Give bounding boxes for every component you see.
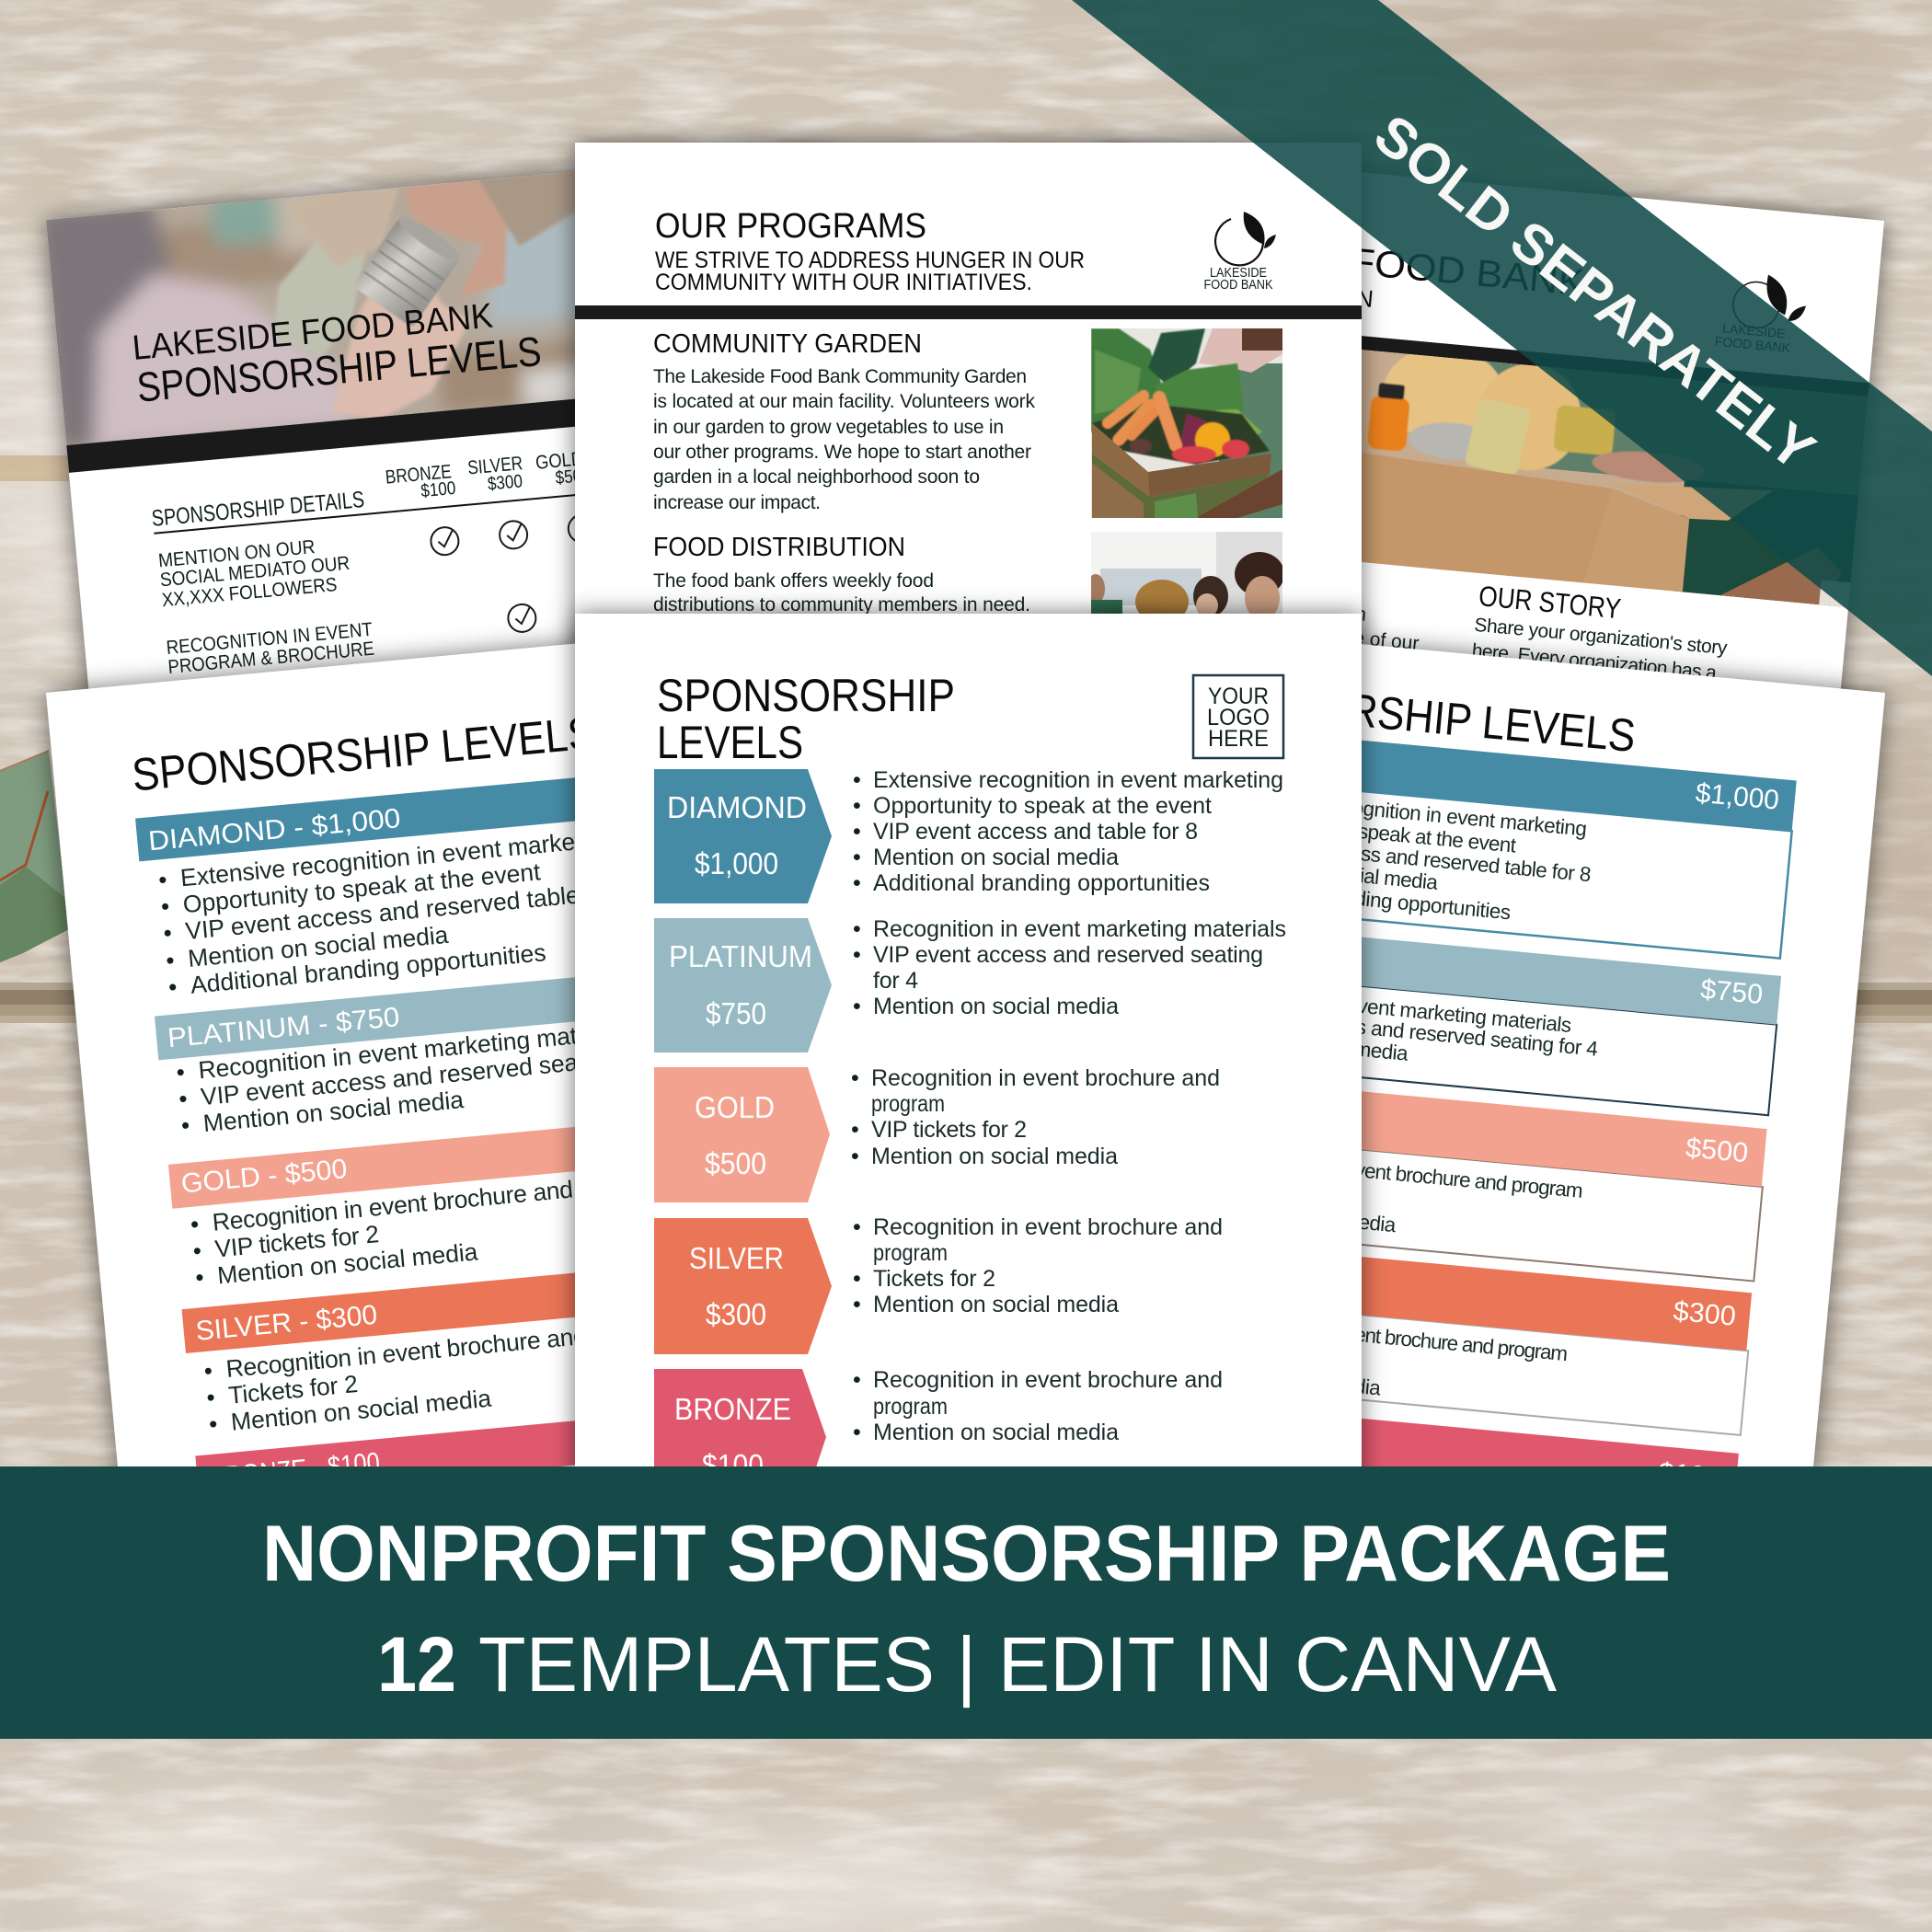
tier: silver: SILVER — [689, 1241, 784, 1275]
tier: platinum: • — [180, 1111, 191, 1139]
heading — [657, 670, 955, 768]
logo placeholder: YOUR — [1208, 684, 1269, 709]
text: mission: the core of our — [1294, 622, 1420, 654]
list: diamond benefits: Extensive recognition in event marketing — [873, 767, 1283, 793]
table header: SILVER — [466, 453, 523, 479]
photo: box of food — [1362, 350, 1868, 607]
tier: diamond: Extensive recognition in event marketing — [1233, 785, 1588, 841]
list: diamond benefits — [853, 767, 1283, 896]
panel: our story page (back right) — [1095, 134, 1899, 690]
banner subheading: 12 — [377, 1621, 456, 1708]
icon: logo: FOOD BANK — [1203, 277, 1273, 293]
heading: OUR PROGRAMS — [655, 207, 926, 246]
text: our story: here. Every organization has a — [1471, 640, 1718, 684]
text: food distribution: FOOD DISTRIBUTION — [653, 533, 905, 562]
text: community garden: in our garden to grow vegetables to use in — [653, 417, 1004, 438]
tier: bronze: $100 — [1657, 1457, 1722, 1493]
text: community garden: our other programs. We hope to start another — [653, 442, 1031, 463]
tier: platinum — [155, 957, 808, 1141]
list: platinum benefits: • — [853, 942, 861, 968]
logo placeholder: HERE — [1208, 726, 1269, 752]
icon: check marks — [430, 513, 604, 639]
tier: platinum: PLATINUM - $750 — [167, 1002, 401, 1053]
list: silver benefits: program — [873, 1240, 948, 1266]
list: platinum benefits: • — [853, 916, 861, 942]
icon: eucalyptus leaf — [0, 751, 69, 962]
tier: bronze — [1075, 1393, 1739, 1512]
text: community garden: is located at our main facility. Volunteers work — [653, 391, 1036, 412]
tier: bronze — [654, 1369, 826, 1509]
list: diamond benefits: • — [853, 870, 861, 896]
text: community garden: increase our impact. — [653, 492, 821, 513]
heading: WE STRIVE TO ADDRESS HUNGER IN OUR — [655, 247, 1085, 273]
list: gold benefits: • — [851, 1144, 859, 1169]
text: community garden: The Lakeside Food Bank Community Garden — [653, 366, 1027, 387]
logo placeholder — [1193, 675, 1283, 758]
table rows: RECOGNITION IN EVENT — [166, 619, 374, 659]
icon: logo: LAKESIDE — [1210, 265, 1267, 281]
heading — [131, 293, 543, 411]
tier: bronze: $100 — [702, 1448, 764, 1482]
tier: diamond: Opportunity to speak at the event — [1231, 808, 1518, 857]
list: platinum benefits: Mention on social media — [873, 994, 1119, 1019]
tier: gold: Recognition in event brochure and program — [1220, 1146, 1584, 1202]
tier: diamond: Extensive recognition in event marketing — [179, 824, 615, 891]
tier: diamond: DIAMOND - $1,000 — [147, 803, 402, 857]
black band — [1085, 310, 1869, 397]
tier: silver: Recognition in event brochure and program — [1214, 1310, 1569, 1365]
tier: silver — [654, 1218, 832, 1354]
tier: diamond: • — [165, 946, 176, 974]
tier: bronze: BRONZE - $100 — [208, 1447, 381, 1493]
list: silver benefits: Recognition in event brochure and — [873, 1214, 1223, 1240]
tier: diamond: Additional branding opportunities — [1222, 874, 1512, 924]
tier: silver: Tickets for 2 — [227, 1370, 359, 1409]
heading: SPONSORSHIP LEVELS — [130, 707, 597, 801]
tier: platinum: Recognition in event marketing materials — [197, 1017, 636, 1084]
list: silver benefits — [853, 1214, 1223, 1317]
text: food distribution: distributions to community members in need. — [653, 594, 1030, 615]
list: bronze benefits: Recognition in event brochure and — [873, 1367, 1223, 1393]
list: diamond benefits: • — [853, 819, 861, 845]
tier: platinum: • — [175, 1058, 186, 1087]
tier: diamond: Mention on social media — [187, 921, 450, 972]
table header: SPONSORSHIP DETAILS — [151, 487, 365, 532]
icon: logo — [1203, 212, 1276, 293]
tier: gold: GOLD - $500 — [179, 1154, 349, 1200]
tier: platinum: Mention on social media — [1196, 1023, 1409, 1065]
table header: GOLD — [535, 448, 584, 474]
list: diamond benefits: • — [853, 767, 861, 793]
tier: gold — [1097, 1068, 1768, 1282]
tier: platinum — [1112, 915, 1781, 1115]
heading: COMMUNITY WITH OUR INITIATIVES. — [655, 270, 1032, 295]
text: food distribution — [653, 533, 1030, 615]
text: mission — [1294, 598, 1422, 654]
tier: diamond: • — [162, 919, 173, 947]
tier: platinum: Recognition in event marketing materials — [1216, 981, 1572, 1037]
tier: bronze — [195, 1397, 841, 1500]
text: community garden — [653, 329, 1036, 513]
text: community garden: garden in a local neighborhood soon to — [653, 466, 980, 488]
tier: diamond: $1,000 — [1695, 778, 1780, 816]
tier: silver: Recognition in event brochure and program — [224, 1313, 683, 1383]
list: bronze benefits: program — [873, 1394, 948, 1420]
ribbon: sold separately — [1072, 0, 1932, 676]
table rows: MENTION ON OUR — [157, 536, 316, 571]
icon: logo: FOOD BANK — [1714, 334, 1791, 355]
tier: silver: SILVER - $300 — [194, 1300, 379, 1347]
tier: gold: • — [190, 1210, 201, 1238]
ribbon: sold separately: SOLD SEPARATELY — [1363, 102, 1826, 482]
black band — [66, 374, 852, 473]
table rows: XX,XXX FOLLOWERS — [161, 574, 338, 611]
table header: $500 — [555, 466, 592, 489]
tier: silver: • — [205, 1383, 216, 1411]
icon: logo: LAKESIDE — [1722, 320, 1786, 341]
tier: platinum: $750 — [706, 996, 766, 1030]
banner heading: NONPROFIT SPONSORSHIP PACKAGE — [262, 1510, 1671, 1598]
tier: diamond: • — [167, 972, 178, 1001]
text: our story: OUR STORY — [1478, 580, 1622, 625]
table header — [149, 431, 772, 534]
list: diamond benefits: Mention on social media — [873, 845, 1119, 870]
tier: diamond: Additional branding opportunities — [190, 938, 547, 999]
list: gold benefits: • — [851, 1065, 859, 1091]
tier: platinum: PLATINUM — [669, 939, 812, 973]
list: bronze benefits — [853, 1367, 1223, 1445]
tier: diamond — [654, 769, 832, 903]
panel: our programs page (back centre) — [575, 143, 1362, 658]
tier: gold: $500 — [705, 1146, 766, 1180]
list: silver benefits: Tickets for 2 — [873, 1266, 995, 1292]
text: our story — [1471, 580, 1731, 684]
heading: SPONSORSHIP LEVELS — [135, 328, 543, 411]
tier: silver: Mention on social media — [1169, 1357, 1382, 1400]
table header: $100 — [420, 478, 456, 501]
tier: diamond: • — [160, 892, 170, 920]
tier: gold — [168, 1105, 822, 1293]
text: mission: mission — [1300, 598, 1367, 626]
tier: gold: Recognition in event brochure and program — [212, 1167, 669, 1236]
tier: gold: • — [191, 1236, 202, 1265]
tier: diamond: VIP event access and reserved table for 8 — [184, 876, 636, 945]
heading: LAKESIDE FOOD BANK — [1143, 221, 1587, 304]
heading: LEVELS — [657, 717, 803, 768]
list: gold benefits: program — [871, 1091, 945, 1117]
list: bronze benefits: • — [853, 1367, 861, 1393]
table rows: PROGRAM & BROCHURE — [167, 638, 375, 678]
photo: hands passing a food can — [46, 171, 575, 445]
photo: volunteers — [1091, 532, 1282, 614]
tier: gold: VIP tickets for 2 — [213, 1220, 380, 1263]
list: platinum benefits: Recognition in event marketing materials — [873, 916, 1286, 942]
list: diamond benefits: VIP event access and table for 8 — [873, 819, 1198, 845]
tier: diamond: Mention on social media — [1227, 852, 1439, 894]
list: platinum benefits: VIP event access and reserved seating — [873, 942, 1263, 968]
list: platinum benefits: • — [853, 994, 861, 1019]
text: community garden: COMMUNITY GARDEN — [653, 329, 922, 359]
tier: silver: • — [208, 1409, 219, 1438]
text: food distribution: The food bank offers weekly food — [653, 570, 934, 592]
table rows: SOCIAL MEDIATO OUR — [159, 553, 351, 591]
tier: platinum: Mention on social media — [202, 1086, 465, 1137]
banner subheading: TEMPLATES | EDIT IN CANVA — [478, 1621, 1557, 1708]
list: diamond benefits: • — [853, 845, 861, 870]
list: platinum benefits — [853, 916, 1286, 1019]
panel: sponsorship levels page (front centre) — [575, 614, 1362, 1534]
list: silver benefits: • — [853, 1214, 861, 1240]
tier: diamond: $1,000 — [695, 846, 778, 880]
tier: diamond — [1127, 720, 1797, 959]
tier: diamond: VIP event access and reserved table for 8 — [1229, 830, 1593, 886]
tier: silver — [1083, 1232, 1754, 1435]
panel: sponsorship levels page (front left) — [46, 620, 914, 1609]
tier: diamond — [135, 759, 794, 1003]
tier: bronze: BRONZE — [674, 1392, 791, 1426]
tier: silver: Tickets for 2 — [1171, 1332, 1281, 1364]
heading: SPONSORSHIP LEVELS — [1173, 668, 1638, 762]
tier: gold: GOLD — [695, 1090, 775, 1124]
list: diamond benefits: • — [853, 793, 861, 819]
banner: title — [0, 1466, 1932, 1739]
tier: gold — [654, 1067, 830, 1202]
panel: sponsorship levels page (front right) — [1017, 620, 1885, 1609]
heading — [1140, 221, 1587, 332]
heading: LAKESIDE FOOD BANK — [131, 297, 494, 368]
list: gold benefits: VIP tickets for 2 — [871, 1117, 1027, 1143]
tier: diamond: • — [157, 866, 168, 894]
table header: $300 — [487, 471, 523, 495]
tier: silver: $300 — [1672, 1296, 1737, 1332]
table header: BRONZE — [385, 461, 453, 489]
heading: SPONSORSHIP — [657, 670, 955, 721]
tier: platinum: $750 — [1699, 974, 1765, 1010]
list: gold benefits: Recognition in event brochure and — [871, 1065, 1220, 1091]
list: diamond benefits: Opportunity to speak at the event — [873, 793, 1212, 819]
tier: diamond: Opportunity to speak at the event — [182, 857, 542, 918]
text: our story: Share your organization's story — [1473, 615, 1729, 659]
tier: platinum: • — [178, 1085, 189, 1112]
tier: silver: $300 — [706, 1297, 766, 1331]
list: silver benefits: Mention on social media — [873, 1292, 1119, 1317]
list: bronze benefits: • — [853, 1420, 861, 1445]
heading — [655, 207, 1085, 295]
list: bronze benefits: Mention on social media — [873, 1420, 1119, 1445]
list: silver benefits: • — [853, 1266, 861, 1292]
heading: OUR MISSION — [1212, 270, 1374, 313]
panel: sponsorship levels table page (back left) — [31, 134, 835, 690]
icon: logo — [1714, 270, 1809, 356]
tier: platinum — [654, 918, 832, 1052]
list: silver benefits: • — [853, 1292, 861, 1317]
photo: vegetable crate — [1091, 328, 1282, 518]
tier: silver: Mention on social media — [230, 1385, 493, 1436]
tier: silver — [182, 1250, 835, 1440]
black band — [575, 305, 1362, 319]
list: gold benefits: • — [851, 1117, 859, 1143]
tier: platinum: VIP event access and reserved seating for 4 — [200, 1040, 672, 1110]
list: gold benefits — [851, 1065, 1220, 1169]
tier: silver: • — [202, 1357, 213, 1385]
tier: gold: Mention on social media — [1184, 1194, 1397, 1236]
logo placeholder: LOGO — [1207, 705, 1270, 730]
list: platinum benefits: for 4 — [873, 968, 918, 994]
tier: diamond: DIAMOND — [667, 790, 807, 824]
tier: gold: • — [194, 1263, 205, 1292]
list: diamond benefits: Additional branding opportunities — [873, 870, 1210, 896]
list: gold benefits: Mention on social media — [871, 1144, 1118, 1169]
tier: gold: $500 — [1685, 1133, 1750, 1168]
table rows — [157, 532, 375, 678]
tier: platinum: VIP event access and reserved seating for 4 — [1214, 1002, 1599, 1061]
tier: gold: VIP tickets for 2 — [1187, 1168, 1324, 1204]
tier: gold: Mention on social media — [216, 1237, 479, 1289]
